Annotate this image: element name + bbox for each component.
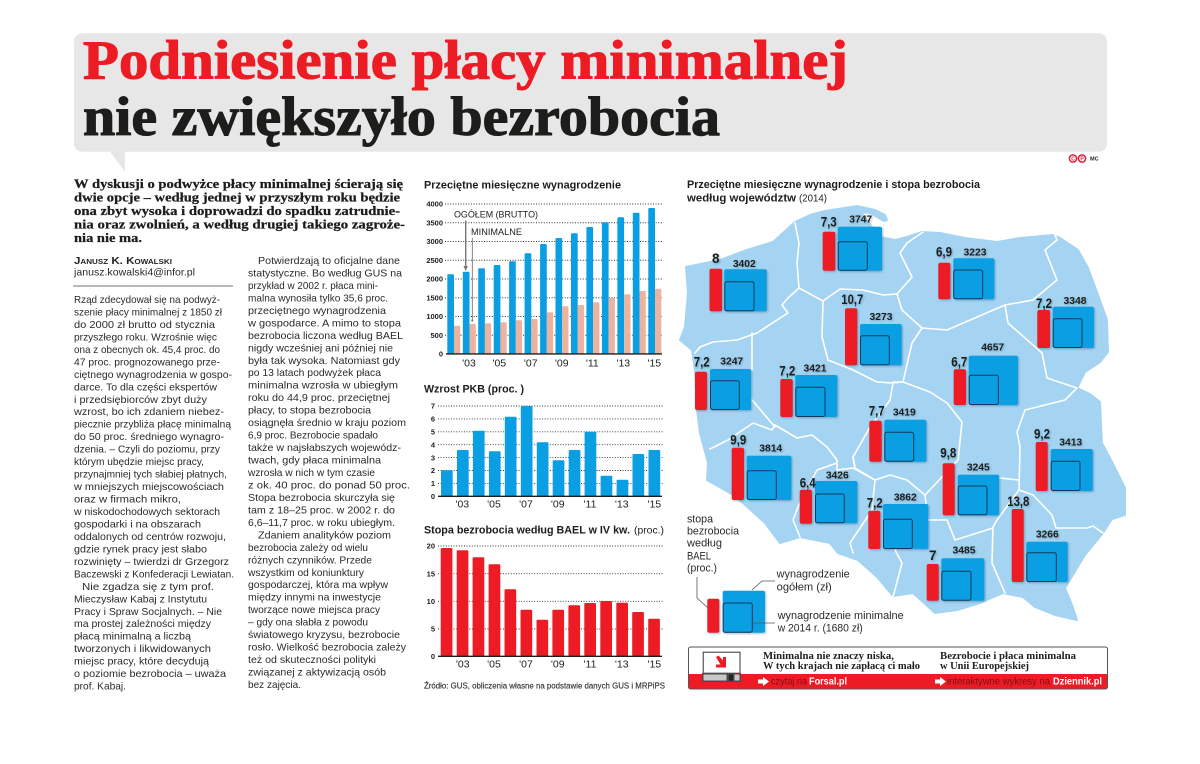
region: 9,9 / 3814: 9,9 (730, 432, 746, 447)
article text: left column: prof. Kabaj. (74, 681, 126, 693)
region: 7,2 / 3421 (779, 363, 837, 417)
source note: Źródło: GUS, obliczenia własne na podstawie danych GUS i MRPiPS (424, 680, 665, 690)
region: 8 / 3402 (710, 251, 767, 311)
legend: total wage label: ogółem (zł) (777, 581, 832, 593)
region: 7,7 / 3419: 3419 (893, 407, 916, 418)
y axis labels: wage: 2500 (426, 256, 443, 265)
article text: right column: Potwierdzają to oficjalne dane (258, 255, 400, 267)
lead paragraph: W dyskusji o podwyżce płacy minimalnej ścierają się (74, 177, 403, 191)
article text: right column: związanej z aktywizacją osób (248, 666, 386, 678)
region: 7,7 / 3419: 7,7 (869, 404, 885, 419)
legend: unemployment label: według (686, 538, 722, 550)
article text: left column: Pracy i Spraw Socjalnych. – Nie (74, 606, 222, 618)
x axis labels: unemployment: '11 (584, 659, 597, 671)
banner: Dziennik link: interaktywne wykresy na (947, 676, 1050, 688)
article text: right column: wzrosła w nich w tym czasie (247, 467, 375, 479)
region: 9,2 / 3413 (1034, 426, 1093, 491)
y axis labels: wage: 2000 (426, 275, 443, 284)
banner: first link title (763, 651, 920, 672)
region: 13,8 / 3266: 3266 (1036, 529, 1059, 540)
y axis labels: unemployment: 20 (427, 542, 435, 551)
x axis labels: unemployment: '15 (647, 659, 661, 671)
title: black line: nie zwiększyło bezrobocia (83, 86, 720, 147)
region: 6,7 / 4657: 4657 (981, 342, 1004, 353)
y axis labels: wage: 500 (430, 331, 443, 340)
article text: right column: była tak wysoka. Natomiast gdy (248, 355, 401, 367)
logo: copyright marks: P (1080, 156, 1084, 162)
region: 6,4 / 3426: 6,4 (800, 475, 816, 490)
article text: right column: 6,9 proc. Bezrobocie spadało (248, 430, 378, 442)
article text: right column: osiągnęła średnio w kraju poziom (248, 417, 406, 429)
article text: left column (73, 294, 234, 693)
region: 6,4 / 3426 (800, 470, 857, 524)
x axis labels: wage: '05 (492, 358, 506, 370)
y axis labels: GDP: 6 (431, 415, 435, 424)
region: 7 / 3485 (927, 545, 984, 601)
author byline: janusz.kowalski4@infor.pl (73, 266, 195, 278)
article text: left column: dzenia. – Czyli do poziomu, przy (74, 444, 221, 456)
article text: left column: gdzie rynek pracy jest słabo (74, 543, 207, 555)
y axis labels: wage: 0 (439, 350, 443, 358)
region: 6,7 / 4657 (951, 342, 1018, 405)
x axis labels: unemployment: '13 (615, 659, 629, 671)
article text: left column: ma prostej zależności między (74, 618, 212, 630)
region: 7,2 / 3421: 7,2 (779, 363, 795, 378)
banner: Dziennik link: Dziennik.pl (1053, 676, 1102, 688)
article text: left column: piecznie przybliża płacę minimalną (74, 419, 231, 431)
x axis labels: wage: '13 (616, 358, 630, 370)
legend: minimum wage label (777, 610, 904, 635)
x axis labels: unemployment: '03 (456, 659, 470, 671)
article text: right column: gospodarczej, która ma wpływ (248, 579, 388, 591)
article text: right column: minimalna wzrosła w ubiegłym (248, 380, 398, 392)
region: 9,2 / 3413: 3413 (1059, 437, 1082, 448)
article text: left column: wzrost, bo ich zdaniem niebez- (73, 406, 225, 418)
region: 7 / 3485: 3485 (953, 545, 976, 556)
article text: left column: przynajmniej tych słabiej płatnych, (74, 469, 227, 481)
legend: unemployment label: (proc.) (687, 563, 717, 575)
article text: right column: wszystkim od koniunktury (247, 567, 365, 579)
article text: right column: światowego kryzysu, bezrobocie (248, 629, 400, 641)
chart heading: unemployment: (proc.) (634, 524, 664, 536)
banner: Forsal link: czytaj na (771, 676, 807, 688)
article text: left column: tworzonych i likwidowanych (74, 643, 211, 655)
region: 7,3 / 3747: 3747 (849, 215, 872, 226)
article text: left column: miejsc pracy, które decydują (74, 656, 209, 668)
map heading: według województw (686, 193, 797, 205)
y axis labels: unemployment (427, 542, 435, 661)
y axis labels: GDP (431, 402, 436, 501)
article text: right column: tam z 18–25 proc. w 2002 r. do (248, 504, 395, 516)
region: 10,7 / 3273 (841, 292, 902, 365)
x axis labels: GDP: '13 (615, 498, 629, 510)
bars: gross wage (447, 208, 655, 354)
banner: Forsal link: Forsal.pl (809, 676, 847, 688)
region: 9,8 / 3245: 9,8 (940, 446, 957, 461)
region: 7,2 / 3247: 7,2 (694, 355, 710, 370)
article text: left column: i przedsiębiorców zbyt duży (74, 394, 208, 406)
lead paragraph (74, 177, 405, 245)
y axis labels: wage: 1000 (426, 312, 443, 321)
legend: unemployment label: stopa (687, 513, 713, 525)
region: 6,9 / 3223 (936, 245, 994, 299)
x axis labels: unemployment: '07 (519, 659, 533, 671)
banner: second link title: Bezrobocie i płaca minimalna (940, 651, 1076, 662)
author byline (73, 256, 233, 286)
article text: right column (247, 255, 410, 691)
article text: right column: malna wynosiła tylko 35,6 proc. (248, 292, 388, 304)
y axis labels: GDP: 7 (431, 402, 435, 411)
y axis labels: GDP: 0 (431, 492, 435, 501)
region: 6,7 / 4657: 6,7 (951, 355, 967, 370)
y axis labels: wage: 3000 (426, 237, 443, 246)
region: 9,8 / 3245: 3245 (967, 462, 990, 473)
article text: left column: przyszłego roku. Wzrośnie więc (74, 331, 217, 343)
region: 9,2 / 3413: 9,2 (1034, 426, 1050, 441)
article text: right column: też od skuteczności polityki (248, 654, 376, 666)
article text: left column: ona z obecnych ok. 45,4 proc. do (74, 344, 220, 356)
x axis labels: GDP (455, 498, 661, 510)
callout: minimum wage (471, 227, 522, 322)
x axis labels: GDP: '07 (519, 498, 533, 510)
banner: Forsal link (758, 676, 847, 688)
y axis labels: wage: 4000 (426, 200, 443, 209)
article text: right column: różnych czynników. Przede (248, 554, 372, 566)
x axis labels: GDP: '15 (647, 498, 661, 510)
title panel (74, 30, 1107, 172)
article text: right column: przykład w 2002 r. płaca mini- (248, 280, 378, 292)
legend: minimum wage label: wynagrodzenie minimalne (777, 610, 904, 622)
chart heading: wage: Przeciętne miesięczne wynagrodzenie (424, 179, 621, 191)
logo: copyright marks (1069, 155, 1099, 162)
article text: left column: do 2000 zł brutto od stycznia (74, 319, 215, 331)
article text: left column: w niskodochodowych sektorach (73, 506, 220, 518)
banner: read more online (688, 647, 1108, 689)
map heading: (2014) (799, 193, 827, 205)
y axis labels: unemployment: 0 (431, 652, 435, 661)
map legend (686, 513, 904, 635)
bars: GDP (441, 406, 660, 496)
region: 7,2 / 3348: 3348 (1064, 296, 1087, 307)
region: 7,2 / 3348 (1036, 296, 1094, 348)
article text: right column: 6,6–11,7 proc. w roku ubiegłym. (248, 517, 395, 529)
y axis labels: GDP: 5 (431, 428, 435, 436)
banner: first link title: W tych krajach nie zapłacą ci mało (763, 661, 920, 672)
article text: left column: Nie zgadza się z tym prof. (82, 581, 214, 593)
x axis labels: GDP: '03 (455, 498, 469, 510)
chart: GDP growth (424, 383, 663, 510)
article text: right column: Stopa bezrobocia skurczyła się (248, 492, 395, 504)
title: red line: Podniesienie płacy minimalnej (83, 30, 848, 90)
x axis labels: wage: '11 (586, 358, 599, 370)
article text: left column: w mniejszych miejscowościach (73, 481, 224, 493)
map heading (686, 179, 981, 205)
article text: right column: płacy, to stopa bezrobocia (248, 405, 371, 417)
banner: second link title: w Unii Europejskiej (940, 661, 1029, 672)
logo: copyright marks: C (1071, 156, 1075, 162)
region: 9,9 / 3814: 3814 (759, 444, 782, 455)
article text: right column: między innymi na inwestycje (248, 592, 381, 604)
lead paragraph: nia nie ma. (74, 231, 142, 245)
region: 7,2 / 3421: 3421 (804, 364, 827, 375)
x axis labels: unemployment: '09 (551, 659, 565, 671)
region: 7,3 / 3747: 7,3 (821, 215, 837, 230)
region: 7 / 3485: 7 (929, 548, 936, 563)
article text: left column: ciętnego wynagrodzenia w gospo- (74, 369, 232, 381)
legend: minimum wage label: w 2014 r. (1680 zł) (777, 623, 863, 635)
article text: right column: nigdy wcześniej ani później nie (248, 342, 393, 354)
region: 10,7 / 3273: 10,7 (841, 292, 863, 307)
legend: unemployment label: BAEL (687, 550, 711, 562)
region: 8 / 3402: 3402 (733, 259, 756, 270)
legend: total wage label: wynagrodzenie (776, 569, 850, 581)
chart heading: GDP: Wzrost PKB (proc. ) (424, 383, 524, 395)
callout: minimum wage: MINIMALNE (471, 227, 522, 238)
article text: left column: oddalonych od centrów rozwoju, (74, 531, 226, 543)
callout: gross wage: OGÓŁEM (BRUTTO) (454, 210, 538, 221)
article text: right column: w gospodarce. A mimo to stopa (247, 317, 401, 329)
icon: laptop (702, 652, 741, 682)
banner: Dziennik link (935, 676, 1102, 688)
x axis labels: GDP: '09 (551, 498, 565, 510)
chart: unemployment rate (424, 524, 664, 671)
region: 6,9 / 3223: 3223 (964, 248, 987, 259)
legend: unemployment label: bezrobocia (687, 526, 739, 538)
legend: total wage label (776, 569, 850, 593)
chart heading: unemployment: Stopa bezrobocia według BAEL w IV kw. (424, 524, 630, 536)
y axis labels: wage: 1500 (426, 293, 443, 302)
region: 9,9 / 3814 (730, 432, 791, 500)
region: 7,2 / 3247 (694, 355, 751, 410)
article text: right column: bezrobocia liczona według BAEL (248, 330, 403, 342)
article text: left column: o poziomie bezrobocia – uważa (74, 668, 226, 680)
x axis labels: wage: '09 (555, 358, 569, 370)
article text: left column: oraz w firmach mikro, (74, 494, 181, 506)
map heading: Przeciętne miesięczne wynagrodzenie i stopa bezrobocia (687, 179, 981, 191)
region: 10,7 / 3273: 3273 (870, 312, 893, 323)
article text: right column: przeciętnego wynagrodzenia (248, 305, 386, 317)
x axis labels: unemployment: '05 (487, 659, 501, 671)
region: 7,2 / 3862 (867, 493, 928, 549)
article text: left column: do 50 proc. średniego wynagro- (74, 431, 225, 443)
chart: average monthly wage (424, 179, 663, 370)
article text: right column: – gdy ona słabła z powodu (248, 617, 368, 629)
y axis labels: GDP: 4 (431, 440, 436, 449)
region: 7,2 / 3348: 7,2 (1036, 296, 1052, 311)
article text: right column: tworzące nowe miejsca pracy (248, 604, 381, 616)
article text: right column: roku do 44,9 proc. przeciętnej (248, 392, 390, 404)
region: 9,8 / 3245 (940, 446, 999, 515)
legend: unemployment label (686, 513, 739, 575)
article text: left column: Mieczysław Kabaj z Instytutu (74, 593, 207, 605)
x axis labels: GDP: '11 (584, 498, 597, 510)
region: 7,3 / 3747 (821, 215, 882, 271)
region: 8 / 3402: 8 (712, 251, 720, 266)
logo: copyright marks: MC (1090, 156, 1099, 162)
article text: left column: którym ubędzie miejsc pracy, (74, 456, 204, 468)
region: 7,2 / 3862: 7,2 (867, 495, 883, 510)
article text: left column: darce. To dla części ekspertów (74, 381, 217, 393)
bars: minimum wage (454, 289, 661, 354)
x axis labels: wage: '03 (462, 358, 476, 370)
region: 13,8 / 3266 (1007, 494, 1068, 582)
lead paragraph: dwie opcje – według jednej w przyszłym roku będzie (74, 190, 400, 204)
article text: right column: rosło. Wielkość bezrobocia zależy (248, 642, 407, 654)
y axis labels: unemployment: 15 (427, 569, 435, 578)
callout: gross wage (454, 210, 538, 271)
y axis labels: GDP: 3 (431, 453, 435, 462)
y axis labels: unemployment: 10 (427, 597, 435, 606)
article text: left column: Rząd zdecydował się na podwyż- (74, 294, 220, 306)
article text: left column: szenie płacy minimalnej z 1850 zł (74, 306, 223, 318)
banner: second link title (940, 651, 1076, 672)
article text: right column: po 13 latach podwyżek płaca (248, 367, 381, 379)
x axis labels: wage (462, 358, 661, 370)
region: 6,4 / 3426: 3426 (826, 470, 849, 481)
article text: right column: także w najsłabszych wojewódz- (248, 442, 402, 454)
x axis labels: unemployment (456, 659, 661, 671)
lead paragraph: nia oraz zwolnień, a według drugiej takiego zagroże- (74, 218, 405, 232)
article text: left column: gospodarki i na obszarach (74, 518, 201, 530)
article text: left column: 47 proc. prognozowanego prze- (74, 356, 220, 368)
legend: sample bar and squares (707, 591, 765, 633)
article text: right column: Zdaniem analityków poziom (258, 529, 391, 541)
article text: right column: twach, gdy płaca minimalna (248, 454, 381, 466)
article text: left column: Baczewski z Konfederacji Lewiatan. (74, 568, 234, 580)
region: 7,2 / 3247: 3247 (720, 356, 743, 367)
y axis labels: unemployment: 5 (431, 625, 435, 634)
y axis labels: wage (426, 200, 443, 358)
banner: first link title: Minimalna nie znaczy niska, (763, 651, 894, 662)
article text: right column: statystyczne. Bo według GUS na (248, 268, 402, 280)
y axis labels: wage: 3500 (426, 218, 443, 227)
y axis labels: GDP: 2 (431, 466, 435, 475)
x axis labels: wage: '07 (524, 358, 538, 370)
author byline: Janusz K. Kowalski (74, 256, 172, 267)
bars: unemployment (441, 548, 660, 656)
article text: right column: bezrobocia zależy od wielu (248, 542, 368, 554)
region: 6,9 / 3223: 6,9 (936, 245, 952, 260)
article text: left column: rozwinięty – twierdzi dr Grzegorz (74, 556, 229, 568)
x axis labels: GDP: '05 (487, 498, 501, 510)
lead paragraph: ona zbyt wysoka i doprowadzi do spadku zatrudnie- (74, 204, 400, 218)
article text: right column: z ok. 40 proc. do ponad 50 proc. (248, 480, 410, 492)
region: 13,8 / 3266: 13,8 (1007, 494, 1030, 509)
region: 7,2 / 3862: 3862 (894, 493, 917, 504)
article text: left column: płacą minimalną a liczbą (74, 631, 191, 643)
map of Poland (680, 206, 1125, 620)
region: 7,7 / 3419 (869, 404, 926, 462)
y axis labels: GDP: 1 (431, 479, 435, 488)
x axis labels: wage: '15 (647, 358, 661, 370)
article text: right column: bez zajęcia. (248, 679, 301, 691)
